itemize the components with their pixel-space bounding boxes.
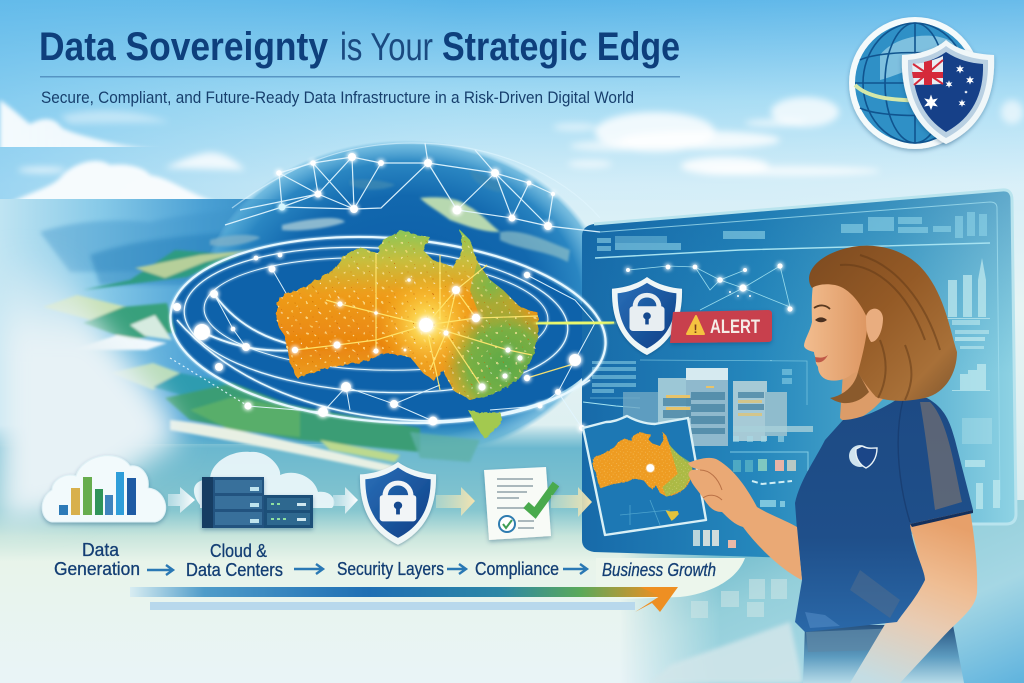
title: Data Sovereignty xyxy=(39,25,329,69)
progress arrow xyxy=(130,587,678,612)
flow labels: Compliance xyxy=(475,559,559,579)
subtitle: Secure, Compliant, and Future-Ready Data Infrastructure in a Risk-Driven Digital World xyxy=(41,88,634,107)
clouds xyxy=(0,97,1023,204)
network nodes xyxy=(173,153,585,431)
left white fade xyxy=(0,250,180,525)
flow step 1: data generation cloud xyxy=(42,456,166,522)
dashboard right charts xyxy=(944,258,1000,509)
label arrows xyxy=(147,564,587,575)
dashboard panel xyxy=(582,190,1016,558)
belt xyxy=(806,628,900,652)
trousers xyxy=(803,625,964,683)
title: Strategic Edge xyxy=(442,25,680,69)
face xyxy=(804,280,880,381)
arrow 2 xyxy=(333,487,358,514)
alert badge xyxy=(670,310,772,343)
flow step 3: security shield xyxy=(360,462,436,545)
shield with padlock on dashboard xyxy=(612,277,682,355)
flow labels: Business Growth xyxy=(602,560,716,580)
ear xyxy=(866,309,883,342)
orbit rings xyxy=(164,223,612,437)
dome network lines xyxy=(170,143,600,428)
flow step 2: cloud and data centers xyxy=(194,452,334,528)
arrow 3 xyxy=(436,487,475,516)
dashboard lower widgets xyxy=(693,452,808,548)
sea and far landscape xyxy=(0,199,340,444)
dashboard server stacks xyxy=(623,368,813,446)
flow labels: Cloud & xyxy=(210,541,267,561)
flow step 4: compliance document xyxy=(484,467,556,540)
shirt xyxy=(795,396,973,632)
arrow 1 xyxy=(168,487,195,513)
Tasmania xyxy=(468,410,503,438)
globe and shield logo xyxy=(849,17,994,149)
eye and brow xyxy=(814,305,830,322)
shirt logo xyxy=(849,445,877,468)
landscape fields xyxy=(43,250,480,474)
dashboard left table xyxy=(592,360,792,393)
map of Australia xyxy=(277,230,538,438)
hair xyxy=(809,246,957,403)
flow labels xyxy=(54,540,716,580)
hand-held map panel xyxy=(583,416,706,535)
glowing link to dashboard shield xyxy=(536,322,614,324)
Australian flag xyxy=(912,56,943,85)
upper and lower arm xyxy=(850,510,977,683)
title: is Your xyxy=(340,26,433,69)
dashboard top header bars xyxy=(597,212,987,251)
globe disc xyxy=(163,140,610,460)
globe xyxy=(849,17,981,149)
lower right backdrop xyxy=(596,500,1024,683)
presenter woman xyxy=(688,246,977,683)
title xyxy=(39,25,680,69)
hand and forearm xyxy=(688,458,802,580)
map connection lines xyxy=(295,253,580,390)
alert badge: ALERT xyxy=(710,317,760,338)
flow labels: Generation xyxy=(54,559,140,579)
lips xyxy=(815,355,828,362)
flow labels: Data xyxy=(82,540,120,560)
alert badge: ! xyxy=(694,322,698,336)
dashboard network graphic xyxy=(628,266,790,310)
neck xyxy=(840,358,886,421)
flow labels: Data Centers xyxy=(186,560,283,580)
flow labels: Security Layers xyxy=(337,559,444,579)
shield xyxy=(902,40,994,144)
process flow backdrop xyxy=(0,425,760,683)
arrow 4 xyxy=(551,487,592,517)
